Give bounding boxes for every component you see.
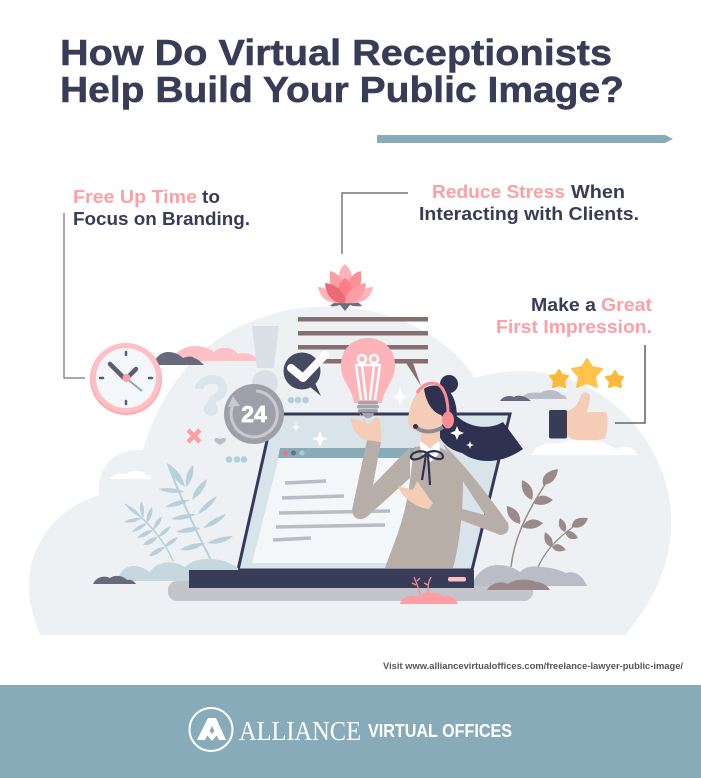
woman: right arm <box>432 444 509 535</box>
plant: small left <box>124 501 178 561</box>
mound: blue <box>117 559 240 581</box>
woman: neck and collar <box>420 428 440 462</box>
source link: Visit www.alliancevirtualoffices.com/freelance-lawyer-public-image/ <box>383 661 684 671</box>
mound: grey <box>472 565 587 586</box>
callout text: great first impression: Great <box>601 295 652 315</box>
pink mound with sprig <box>400 577 458 604</box>
woman: hair back <box>438 416 523 461</box>
callout text: great first impression: First Impression. <box>496 317 652 337</box>
icon: pink x <box>188 430 200 442</box>
icon: checkmark bubble <box>284 352 325 396</box>
white cloud left <box>110 471 151 479</box>
icon: three stars <box>550 359 623 387</box>
dots lower <box>226 456 247 463</box>
document panel <box>252 457 440 563</box>
title: Help Build Your Public Image? <box>60 69 624 110</box>
plant: large left <box>158 463 233 560</box>
laptop screen <box>238 414 510 570</box>
dark cloud bottom left <box>93 576 136 584</box>
footer logo <box>190 708 232 751</box>
background blob <box>29 307 671 635</box>
browser title bar <box>278 448 425 458</box>
icon: 24 hour badge: 24 <box>241 401 267 427</box>
grey clouds right <box>500 390 567 401</box>
icon: small heart <box>214 438 226 445</box>
icon: clock <box>90 343 162 415</box>
title: How Do Virtual Receptionists <box>60 32 612 73</box>
callout text: reduce stress <box>419 182 639 224</box>
callout text: free up time: Focus on Branding. <box>73 209 250 229</box>
footer brand name <box>239 716 512 746</box>
white cloud under thumb <box>532 440 637 455</box>
woman: headset <box>413 383 454 432</box>
icon: thumbs up <box>549 392 608 440</box>
footer brand name: ALLIANCE <box>239 716 361 746</box>
woman: raised hand <box>351 412 381 442</box>
callout text: free up time: to <box>202 187 220 207</box>
dark cloud <box>153 352 204 365</box>
icon: lotus <box>318 264 373 311</box>
callout text: great first impression: Make a <box>531 295 597 315</box>
question mark <box>199 379 223 416</box>
exclamation mark <box>252 326 279 396</box>
pink cloud <box>170 346 258 361</box>
mound: brown <box>487 580 550 590</box>
woman: face <box>408 387 445 433</box>
sparkles on hair <box>450 426 474 449</box>
title <box>60 32 624 110</box>
sparkles on screen <box>292 422 328 448</box>
callout text: reduce stress: When <box>571 182 625 202</box>
laptop button <box>448 577 466 582</box>
footer brand name: VIRTUAL OFFICES <box>368 721 512 741</box>
icon: 24 hour badge <box>224 384 284 444</box>
callout text: reduce stress: Reduce Stress <box>432 182 565 202</box>
leader line: clock <box>64 213 85 378</box>
sparkle near bulb <box>392 387 408 406</box>
speech bubble lines <box>298 317 428 386</box>
dots <box>288 397 309 403</box>
title accent bar <box>377 135 673 143</box>
woman: hand on chest <box>398 481 433 509</box>
plant: brown right <box>507 469 588 567</box>
callout text: free up time <box>73 187 250 229</box>
footer band <box>0 685 701 778</box>
woman: hair <box>424 375 458 432</box>
document text lines <box>273 481 390 540</box>
laptop base shadow <box>168 581 533 601</box>
icon: lightbulb <box>341 338 395 418</box>
woman: left arm <box>352 440 410 519</box>
callout text: reduce stress: Interacting with Clients. <box>419 204 639 224</box>
callout text: free up time: Free Up Time <box>73 187 197 207</box>
leader line: lotus <box>342 193 408 254</box>
woman: bow tie <box>411 451 443 485</box>
leader line: thumbs up <box>615 345 645 423</box>
laptop keyboard base <box>189 570 474 588</box>
woman: dress <box>385 445 463 568</box>
callout text: great first impression <box>496 295 652 337</box>
